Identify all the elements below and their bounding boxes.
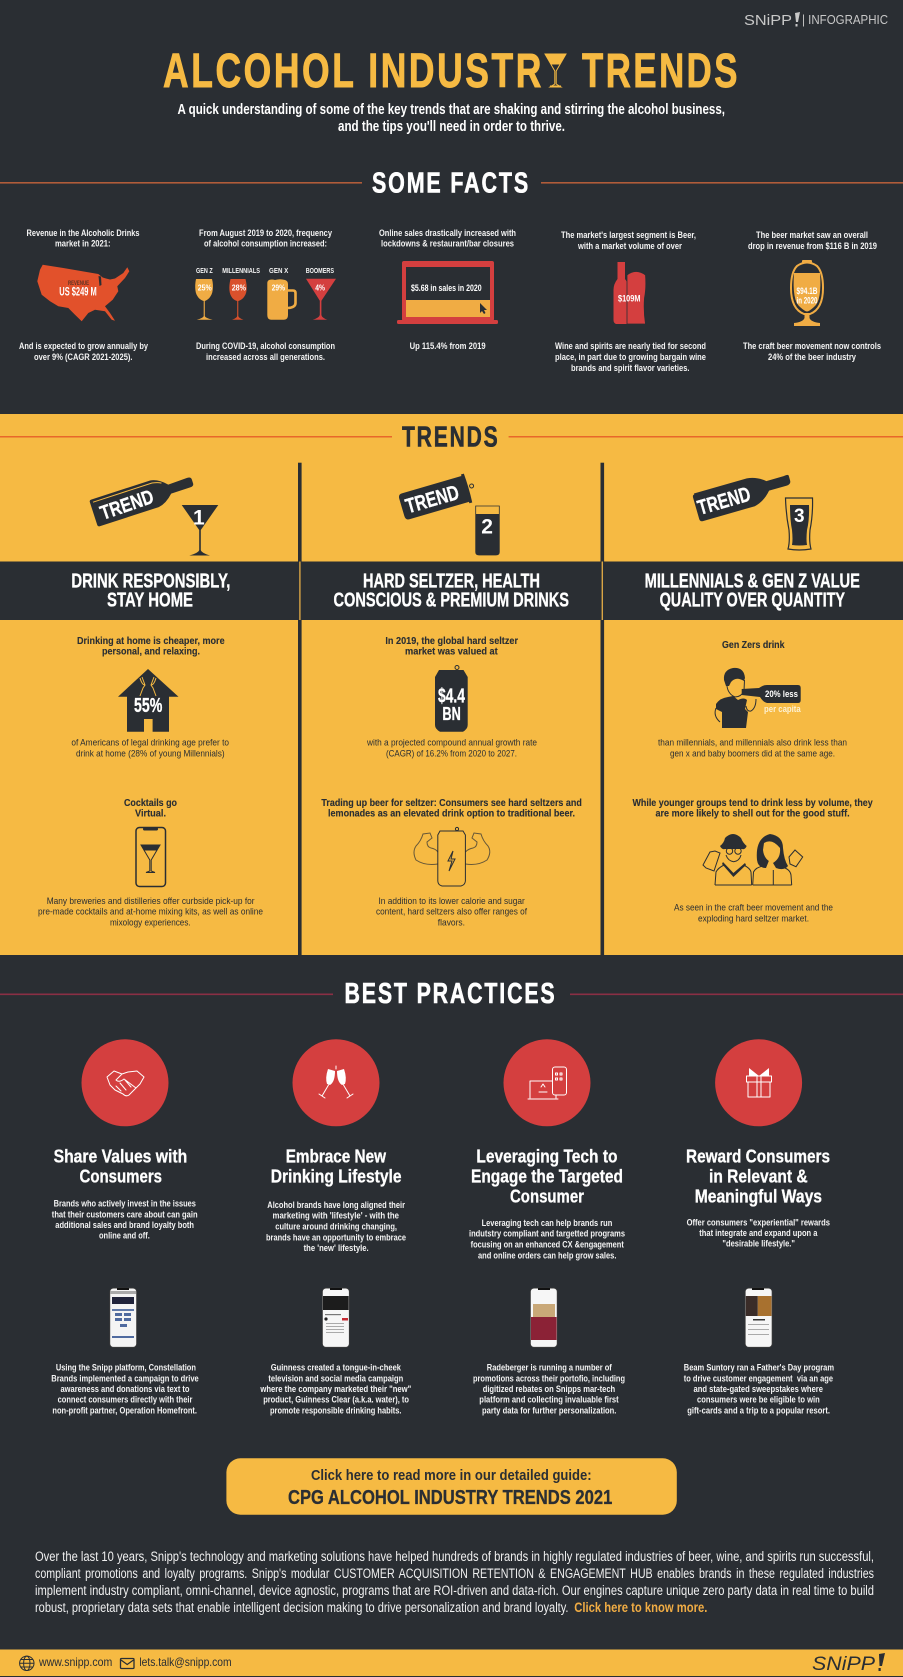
icon: can bbox=[435, 666, 468, 732]
panel: fact generations: During COVID-19, alcohol consumption bbox=[196, 341, 335, 351]
text block: about Snipp: robust, proprietary data sets that enable intelligent decision making to drive personalization and brand loyalty. bbox=[35, 1600, 568, 1615]
panel: fact generations bbox=[195, 228, 336, 362]
panel: fact revenue: Revenue in the Alcoholic Drinks bbox=[26, 228, 140, 238]
panel: fact beer segment: Wine and spirits are nearly tied for second bbox=[555, 341, 706, 351]
panel: example constellation bbox=[51, 1288, 199, 1415]
panel: trend 3 gen z bbox=[658, 640, 847, 759]
panel: example guinness: television and social media campaign bbox=[268, 1373, 403, 1383]
icon: US map bbox=[37, 265, 129, 321]
panel: practice drinking lifestyle: Drinking Lifestyle bbox=[271, 1167, 402, 1187]
trend heading 1: STAY HOME bbox=[107, 590, 193, 612]
icon: phone screenshot bbox=[109, 1288, 137, 1348]
text block: about Snipp: Click here to know more. bbox=[574, 1600, 707, 1615]
panel: practice share values: online and off. bbox=[99, 1231, 150, 1241]
icon: can: BN bbox=[442, 704, 461, 724]
icon: trend 1 bottle and martini: TREND bbox=[97, 486, 157, 525]
panel: practice leveraging tech: Leveraging tech can help brands run bbox=[482, 1218, 612, 1228]
chart: glasses by generation: MILLENNIALS bbox=[222, 268, 260, 275]
panel: trend 1 cocktails virtual: Virtual. bbox=[135, 809, 166, 820]
icon: phone screenshot bbox=[322, 1288, 350, 1348]
icon: bottle and beer glass: $109M bbox=[618, 294, 640, 304]
text block: about Snipp bbox=[35, 1549, 874, 1615]
icon: trend 3 bottle and pint bbox=[692, 467, 813, 550]
panel: practice drinking lifestyle: marketing with 'lifestyle' - with the bbox=[272, 1211, 399, 1221]
subtitle: and the tips you'll need in order to thrive. bbox=[338, 119, 565, 135]
panel: practice drinking lifestyle bbox=[266, 1039, 406, 1253]
panel: fact revenue: And is expected to grow annually by bbox=[19, 341, 148, 351]
panel: fact revenue bbox=[19, 228, 148, 362]
icon: house with glasses bbox=[118, 669, 178, 732]
panel: fact beer segment: place, in part due to growing bargain wine bbox=[555, 352, 706, 362]
panel: practice share values bbox=[52, 1039, 198, 1241]
panel: practice drinking lifestyle: Embrace New bbox=[286, 1147, 387, 1167]
panel: practice reward consumers: Offer consumers "experiential" rewards bbox=[687, 1217, 830, 1227]
panel: practice drinking lifestyle: brands have an opportunity to embrace bbox=[266, 1232, 406, 1242]
panel: practice share values: Share Values with bbox=[54, 1147, 187, 1167]
panel: example constellation: Using the Snipp platform, Constellation bbox=[56, 1363, 196, 1373]
subtitle: A quick understanding of some of the key trends that are shaking and stirring the alcohol business, bbox=[178, 102, 725, 118]
panel: fact beer segment: The market's largest segment is Beer, bbox=[561, 230, 696, 240]
panel: trend 1 drinking at home: of Americans of legal drinking age prefer to bbox=[71, 738, 229, 749]
title: TRENDS bbox=[582, 45, 740, 98]
panel: example beam suntory: gift-cards and a trip to a popular resort. bbox=[687, 1405, 830, 1415]
panel: practice leveraging tech bbox=[469, 1039, 625, 1260]
chart: glasses by generation: 25% bbox=[198, 283, 212, 293]
icon: beer goblet: in 2020 bbox=[796, 296, 818, 306]
panel: trend 1 cocktails virtual bbox=[38, 798, 263, 928]
panel: practice drinking lifestyle: the 'new' lifestyle. bbox=[304, 1243, 369, 1253]
icon: trend 2 can and glass: 2 bbox=[481, 515, 493, 538]
panel: practice reward consumers bbox=[686, 1039, 830, 1249]
footer bar: www.snipp.com bbox=[38, 1655, 112, 1669]
panel: practice leveraging tech: indutstry compliant and targetted programs bbox=[469, 1229, 625, 1239]
panel: trend 2 trading up: content, hard seltzers also offer ranges of bbox=[376, 907, 527, 918]
panel: trend 3 gen z: than millennials, and millennials also drink less than bbox=[658, 738, 847, 749]
icon: mail bbox=[120, 1658, 134, 1668]
panel: example constellation: awareness and donations via text to bbox=[60, 1384, 190, 1394]
footer bar bbox=[0, 1650, 903, 1676]
panel: practice leveraging tech: Leveraging Tech to bbox=[476, 1147, 618, 1167]
icon: champagne flutes bbox=[292, 1039, 380, 1126]
panel: trend 2 seltzer market: In 2019, the global hard seltzer bbox=[385, 636, 518, 647]
panel: trend 2 trading up bbox=[321, 798, 582, 928]
panel: trend 3 younger groups: are more likely to shell out for the good stuff. bbox=[656, 809, 850, 820]
panel: trend 1 cocktails virtual: Cocktails go bbox=[124, 798, 177, 809]
heading: some facts: SOME FACTS bbox=[372, 168, 530, 200]
panel: practice reward consumers: in Relevant & bbox=[709, 1167, 808, 1187]
chart: glasses by generation: 4% bbox=[315, 283, 325, 293]
panel: fact revenue: market in 2021: bbox=[55, 239, 111, 249]
panel: example radeberger: party data for further personalization. bbox=[482, 1405, 616, 1415]
icon: trend 3 bottle and pint: 3 bbox=[794, 506, 805, 527]
panel: fact generations: From August 2019 to 2020, frequency bbox=[199, 228, 332, 238]
panel: example constellation: connect consumers directly with their bbox=[58, 1395, 193, 1405]
panel: trend 2 seltzer market: with a projected compound annual growth rate bbox=[366, 738, 537, 749]
panel: practice leveraging tech: Engage the Targeted bbox=[471, 1167, 623, 1187]
panel: trend 3 younger groups bbox=[632, 798, 873, 924]
panel: trend 3 gen z: gen x and baby boomers did at the same age. bbox=[670, 748, 835, 759]
chart: glasses by generation: 28% bbox=[232, 283, 246, 293]
panel: example constellation: Brands implemented a campaign to drive bbox=[51, 1373, 199, 1383]
panel: practice share values: additional sales and brand loyalty both bbox=[55, 1220, 194, 1230]
panel: trend 1 drinking at home bbox=[71, 636, 229, 759]
icon: phone with cocktail bbox=[136, 828, 166, 886]
trend heading 3 bbox=[645, 570, 860, 612]
icon: man drinking from bottle: 20% less bbox=[765, 689, 798, 700]
panel: example radeberger bbox=[473, 1288, 625, 1415]
panel: example radeberger: platform and collecting invaluable first bbox=[479, 1395, 619, 1405]
panel: example beam suntory: to drive customer engagement via an age bbox=[684, 1373, 833, 1383]
panel: example guinness: product, Guinness Clear (a.k.a. water), to bbox=[263, 1395, 409, 1405]
panel: example radeberger: promotions across their portofio, including bbox=[473, 1373, 625, 1383]
icon: martini glass as letter Y bbox=[545, 54, 566, 87]
icon: house with glasses: 55% bbox=[134, 695, 163, 717]
panel: trend 1 cocktails virtual: Many breweries and distilleries offer curbside pick-up for bbox=[47, 896, 255, 907]
icon: handshake bbox=[82, 1039, 168, 1126]
trend heading 1: DRINK RESPONSIBLY, bbox=[71, 570, 230, 592]
icon: trend 3 bottle and pint: TREND bbox=[695, 483, 753, 520]
icon: trend 1 bottle and martini bbox=[89, 468, 218, 556]
icon: laptop and phone bbox=[504, 1039, 590, 1126]
panel: example constellation: non-profit partner, Operation Homefront. bbox=[52, 1405, 197, 1415]
panel: trend 2 trading up: lemonades as an elevated drink option to traditional beer. bbox=[328, 809, 575, 820]
chart: glasses by generation: 29% bbox=[272, 283, 285, 293]
icon: beer goblet bbox=[791, 260, 823, 326]
icon: phone screenshot bbox=[745, 1288, 772, 1348]
icon: globe bbox=[20, 1656, 34, 1671]
panel: example guinness: Guinness created a tongue-in-cheek bbox=[271, 1363, 402, 1373]
icon: bottle and beer glass bbox=[614, 262, 646, 324]
panel: trend 3 younger groups: exploding hard seltzer market. bbox=[698, 913, 809, 924]
icon: man drinking from bottle: per capita bbox=[764, 704, 801, 715]
icon: couple with drinks bbox=[703, 834, 803, 885]
icon: can: $4.4 bbox=[438, 685, 466, 707]
trend heading 1 bbox=[71, 570, 230, 612]
panel: fact beer revenue: The beer market saw an overall bbox=[756, 230, 868, 240]
panel: fact beer segment: with a market volume of over bbox=[577, 241, 682, 251]
icon: US map: REVENUE bbox=[68, 281, 89, 287]
panel: trend 2 trading up: Trading up beer for seltzer: Consumers see hard seltzers and bbox=[321, 798, 582, 809]
chart: glasses by generation: BOOMERS bbox=[306, 268, 334, 275]
panel: example radeberger: Radeberger is running a number of bbox=[487, 1363, 613, 1373]
panel: practice leveraging tech: and online orders can help grow sales. bbox=[478, 1250, 616, 1260]
icon: trend 2 can and glass: TREND bbox=[403, 481, 462, 518]
panel: trend 1 cocktails virtual: mixology experiences. bbox=[110, 917, 191, 928]
logo: Snipp: SNiPP bbox=[812, 1654, 875, 1675]
panel: example beam suntory: and state-gated sweepstakes where bbox=[694, 1384, 823, 1394]
footer bar: lets.talk@snipp.com bbox=[139, 1655, 232, 1669]
panel: example guinness bbox=[260, 1288, 411, 1415]
panel: fact online sales: lockdowns & restaurant/bar closures bbox=[381, 239, 514, 249]
panel: fact beer segment bbox=[555, 230, 706, 373]
panel: fact online sales: Up 115.4% from 2019 bbox=[410, 341, 486, 351]
panel: practice share values: that their customers care about can gain bbox=[52, 1209, 198, 1219]
trend heading 2: CONSCIOUS & PREMIUM DRINKS bbox=[334, 590, 569, 612]
brand tag: Snipp infographic: SNiPP bbox=[744, 12, 792, 29]
panel: fact beer revenue: drop in revenue from $116 B in 2019 bbox=[748, 241, 877, 251]
panel: example beam suntory: consumers were be eligible to win bbox=[697, 1395, 820, 1405]
panel: trend 3 gen z: Gen Zers drink bbox=[722, 640, 785, 651]
call to action button: CPG ALCOHOL INDUSTRY TRENDS 2021 bbox=[288, 1487, 612, 1509]
brand tag: Snipp infographic bbox=[744, 12, 888, 29]
trend heading 2: HARD SELTZER, HEALTH bbox=[363, 570, 540, 592]
chart: glasses by generation bbox=[195, 268, 336, 320]
panel: fact online sales bbox=[379, 228, 516, 351]
panel: practice reward consumers: Meaningful Ways bbox=[695, 1187, 822, 1207]
panel: trend 2 trading up: In addition to its lower calorie and sugar bbox=[378, 896, 525, 907]
icon: US map: US $249 M bbox=[59, 286, 97, 298]
panel: fact generations: increased across all generations. bbox=[206, 352, 325, 362]
panel: example beam suntory: Beam Suntory ran a Father's Day program bbox=[684, 1363, 834, 1373]
panel: example guinness: promote responsible drinking habits. bbox=[270, 1405, 402, 1415]
panel: trend 1 cocktails virtual: pre-made cocktails and at-home mixing kits, as well as online bbox=[38, 907, 263, 918]
panel: fact generations: of alcohol consumption increased: bbox=[204, 239, 327, 249]
panel: practice leveraging tech: focusing on an enhanced CX &engagement bbox=[471, 1240, 624, 1250]
brand tag: Snipp infographic: | INFOGRAPHIC bbox=[802, 12, 888, 27]
icon: laptop: $5.68 in sales in 2020 bbox=[411, 283, 482, 293]
panel: fact beer revenue: 24% of the beer industry bbox=[768, 352, 856, 362]
heading: trends: TRENDS bbox=[402, 422, 500, 454]
chart: glasses by generation: GEN X bbox=[269, 268, 289, 275]
panel: practice share values: Consumers bbox=[80, 1167, 162, 1187]
panel: trend 1 drinking at home: drink at home (28% of young Millennials) bbox=[76, 748, 225, 759]
panel: example beam suntory bbox=[684, 1288, 834, 1415]
panel: practice reward consumers: that integrate and expand upon a bbox=[699, 1228, 818, 1238]
call to action button: Click here to read more in our detailed guide: bbox=[311, 1468, 592, 1484]
panel: fact online sales: Online sales drastically increased with bbox=[379, 228, 516, 238]
panel: trend 3 younger groups: While younger groups tend to drink less by volume, they bbox=[632, 798, 873, 809]
panel: practice leveraging tech: Consumer bbox=[510, 1187, 584, 1207]
panel: fact beer revenue bbox=[743, 230, 881, 362]
heading: best practices: BEST PRACTICES bbox=[344, 978, 556, 1010]
column dividers bbox=[298, 463, 604, 955]
panel: practice drinking lifestyle: Alcohol brands have long aligned their bbox=[267, 1200, 405, 1210]
icon: gift box bbox=[715, 1039, 802, 1126]
title: ALCOHOL INDUSTR bbox=[163, 45, 544, 98]
icon: trend 2 can and glass bbox=[398, 472, 499, 555]
panel: trend 1 drinking at home: Drinking at home is cheaper, more bbox=[77, 636, 225, 647]
icon: beer goblet: $94.1B bbox=[796, 286, 818, 296]
panel: practice share values: Brands who actively invest in the issues bbox=[54, 1199, 196, 1209]
icon: muscular can bbox=[414, 827, 490, 886]
panel: trend 2 seltzer market bbox=[366, 636, 537, 759]
band: trend headings bbox=[0, 562, 903, 620]
call to action button bbox=[226, 1458, 677, 1515]
panel: fact revenue: over 9% (CAGR 2021-2025). bbox=[34, 352, 132, 362]
icon: trend 1 bottle and martini: 1 bbox=[193, 506, 205, 529]
subtitle bbox=[178, 102, 725, 135]
chart: glasses by generation: GEN Z bbox=[196, 268, 213, 275]
panel: example guinness: where the company marketed their "new" bbox=[260, 1384, 411, 1394]
trend heading 2 bbox=[334, 570, 569, 612]
icon: phone screenshot bbox=[530, 1288, 558, 1348]
icon: man drinking from bottle bbox=[715, 668, 801, 728]
panel: trends section background bbox=[0, 414, 903, 955]
panel: practice drinking lifestyle: culture around drinking changing, bbox=[275, 1221, 397, 1231]
panel: practice reward consumers: "desirable lifestyle." bbox=[722, 1239, 795, 1249]
panel: trend 1 drinking at home: personal, and relaxing. bbox=[102, 647, 200, 658]
panel: trend 2 seltzer market: (CAGR) of 16.2% from 2020 to 2027. bbox=[386, 748, 517, 759]
panel: practice reward consumers: Reward Consumers bbox=[686, 1147, 830, 1167]
panel: trend 2 seltzer market: market was valued at bbox=[405, 647, 498, 658]
panel: example radeberger: digitized rebates on Snipps mar-tech bbox=[483, 1384, 615, 1394]
panel: fact beer segment: brands and spirit flavor varieties. bbox=[571, 363, 690, 373]
panel: trend 2 trading up: flavors. bbox=[438, 917, 465, 928]
panel: trend 3 younger groups: As seen in the craft beer movement and the bbox=[674, 903, 833, 914]
